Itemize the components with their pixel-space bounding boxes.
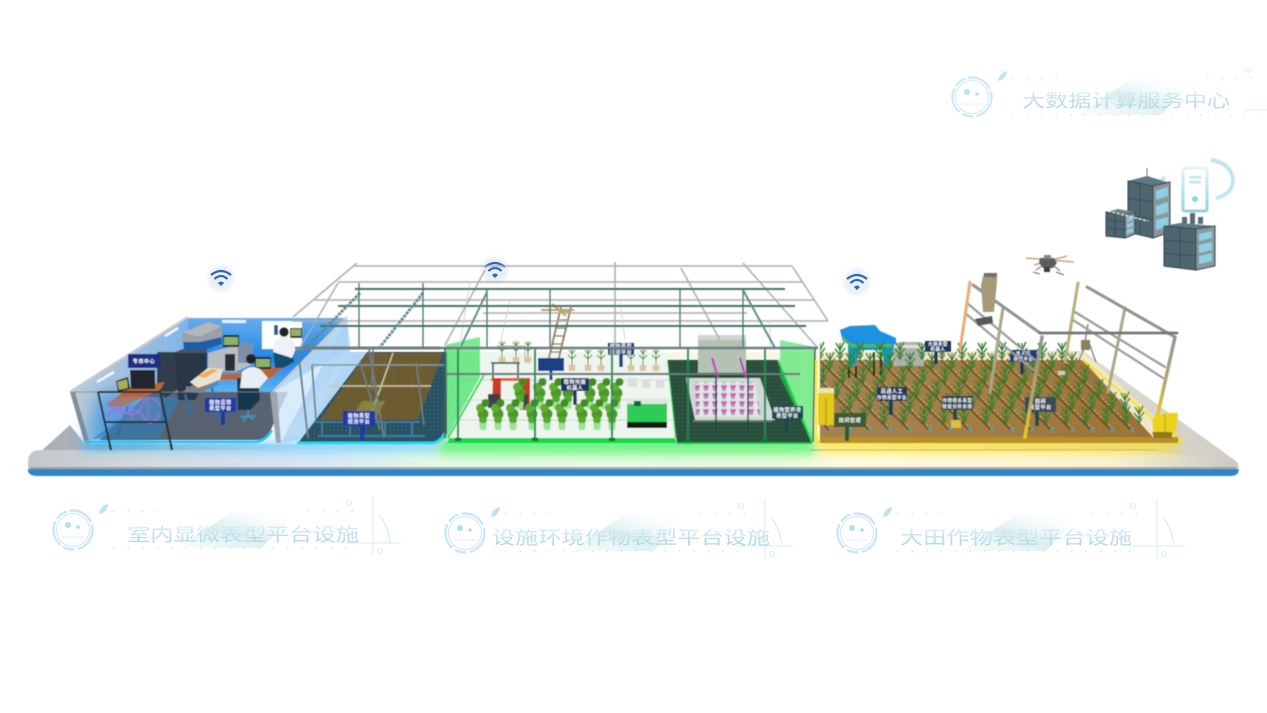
label: centre: 专用中心 xyxy=(133,358,155,365)
label: microscopy platform xyxy=(205,398,236,425)
greenhouse steel frame xyxy=(292,262,828,442)
label: field phenotyping machine xyxy=(877,387,907,415)
front beams and posts xyxy=(295,348,818,374)
ladder robot tower xyxy=(541,304,574,362)
gantry xyxy=(298,348,440,438)
bench with magenta pots xyxy=(686,358,775,432)
label: bay platform: 观测平台 xyxy=(348,418,370,426)
blue glow at corner xyxy=(85,392,200,444)
figure: researcher seated at desk xyxy=(237,354,268,421)
plant beds xyxy=(312,353,445,436)
label: rear platform: 观测平台 xyxy=(610,349,632,356)
grey equipment box xyxy=(893,342,924,366)
yellow control box right xyxy=(1152,413,1178,438)
red field robot xyxy=(488,346,530,410)
title decor and heading: big data centre xyxy=(952,64,1267,122)
green floor xyxy=(447,352,677,443)
weather station xyxy=(1058,324,1096,375)
label: field robot: 植物地面 xyxy=(564,378,586,386)
label: field robot xyxy=(925,340,951,364)
tall server xyxy=(1128,168,1170,238)
icon: wifi field xyxy=(844,269,870,295)
dark rafters xyxy=(307,283,806,348)
label: rear platform: 植物表型 xyxy=(610,343,632,350)
label: field robot xyxy=(561,378,589,405)
platform xyxy=(28,351,1239,476)
title decor and heading: big data centre: 大数据计算服务中心 xyxy=(1022,91,1230,111)
label: field robot: 机器人 xyxy=(567,384,583,392)
green control cabinet xyxy=(627,398,667,428)
label: rear navy sign xyxy=(538,358,564,380)
desk xyxy=(105,365,287,436)
label: field platform: 田间 xyxy=(1035,398,1046,405)
icon: wifi greenhouse xyxy=(482,257,508,283)
left wall xyxy=(70,318,188,444)
label: microscopy platform: 表型平台 xyxy=(209,405,232,412)
monitors xyxy=(116,328,302,392)
heading: indoor microscopic phenotyping facility xyxy=(54,497,401,555)
label: root analysis xyxy=(942,396,973,420)
irrigation rows xyxy=(820,360,1134,430)
front glass xyxy=(73,391,273,393)
heading: greenhouse environment crop phenotyping facility xyxy=(446,500,793,558)
figure: researcher at microscope xyxy=(273,325,296,368)
field gantry xyxy=(960,282,1177,437)
green glass panels xyxy=(445,337,480,437)
label: field management xyxy=(834,413,866,441)
upper roof xyxy=(292,262,828,348)
label: bay platform: 植物表型 xyxy=(348,412,370,420)
label: microscopy platform: 植物显微 xyxy=(209,399,232,406)
potted plants xyxy=(476,378,624,430)
label: bay platform xyxy=(343,411,375,440)
maize plants xyxy=(775,342,1144,432)
purple helix graphic xyxy=(106,397,161,423)
panel: open field xyxy=(814,272,1182,444)
label: rear platform xyxy=(608,343,634,367)
panel: greenhouse crop zone xyxy=(445,304,677,443)
label: field robot: 大田表型 xyxy=(928,340,948,348)
label: field platform: 表型平台 xyxy=(1029,404,1052,411)
instrument: blue analyser xyxy=(182,322,222,350)
label: unmanned platform xyxy=(1010,350,1037,374)
heading: greenhouse environment crop phenotyping facility: 设施环境作物表型平台设施 xyxy=(492,528,770,548)
small server xyxy=(1106,209,1148,238)
sensor carriage xyxy=(975,273,997,326)
label: field robot: 机器人 xyxy=(931,346,945,352)
label: hydroponic platform: 植物营养液 xyxy=(773,406,802,414)
blue field robot xyxy=(840,325,896,378)
green glass right panel xyxy=(780,340,815,442)
panel: potted crop phenotyping bay xyxy=(280,320,447,444)
label: root analysis: 智能分析系统 xyxy=(943,403,972,410)
label: field management: 田间管理 xyxy=(839,417,861,424)
floor xyxy=(100,392,288,440)
soil xyxy=(820,360,1153,437)
heading: indoor microscopic phenotyping facility: 室内显微表型平台设施 xyxy=(127,525,359,545)
label: hydroponic platform xyxy=(772,406,803,433)
yellow soil sensor xyxy=(951,420,961,428)
label: unmanned platform: 表型平台 xyxy=(1014,356,1033,362)
icon: cloud server outline xyxy=(1159,160,1233,224)
growth chamber xyxy=(698,335,746,373)
label: centre xyxy=(128,354,160,368)
label: unmanned platform: 无人机 xyxy=(1016,350,1031,357)
large server xyxy=(1164,223,1215,270)
panel: indoor microscopy room xyxy=(70,317,351,450)
instrument: tall cabinets xyxy=(157,349,207,400)
label: field phenotyping machine: 高通人工 xyxy=(881,388,903,395)
heading: field crop phenotyping facility xyxy=(838,500,1185,558)
icon: wifi indoor xyxy=(208,265,234,291)
instrument: grey analyser xyxy=(208,343,253,372)
back wall and window xyxy=(188,318,347,392)
rear thin plants xyxy=(498,341,664,388)
black display frame xyxy=(98,391,172,450)
label: field phenotyping machine: 作物表型平台 xyxy=(877,394,907,401)
glow: blue, green, yellow under the zones xyxy=(80,436,1178,454)
panel: hydroponic phenotyping zone xyxy=(668,335,815,443)
black instrument xyxy=(130,370,155,389)
label: field platform xyxy=(1025,397,1056,426)
heading: field crop phenotyping facility: 大田作物表型平台设施 xyxy=(900,528,1132,548)
side glass wall xyxy=(273,317,351,444)
yellow control box left xyxy=(818,388,834,425)
label: root analysis: 作物根系表型 xyxy=(943,397,972,404)
icon: drone xyxy=(1026,255,1074,275)
icon: data centre servers xyxy=(1106,160,1233,270)
label: hydroponic platform: 表型平台 xyxy=(776,412,799,420)
